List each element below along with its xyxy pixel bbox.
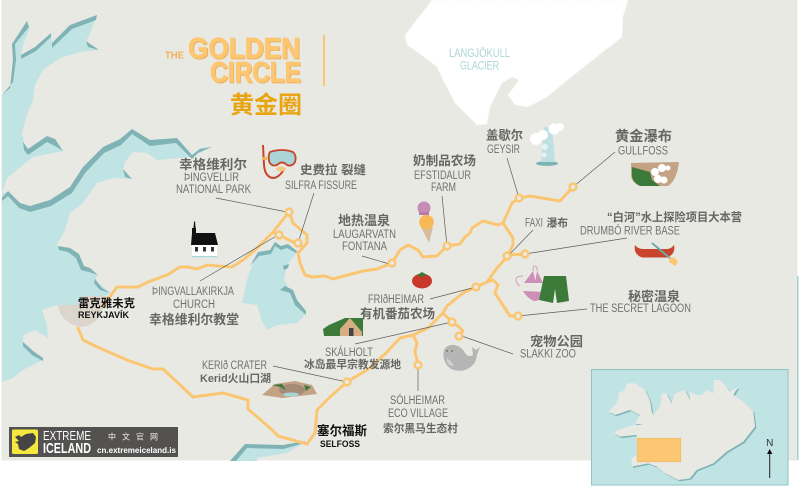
label: Secret Lagoon: THE SECRET LAGOON [590,303,691,315]
icon: tomato [412,272,432,288]
glacier label [449,48,510,72]
icon: Gullfoss waterfall [631,162,679,186]
title: GOLDEN [189,34,301,66]
icon: river raft [635,243,678,266]
icon: turf house [323,318,363,336]
water: western bays [2,15,212,382]
title: GOLDEN [188,33,300,65]
label: Reykjavík: 雷克雅未克 [78,296,135,310]
label: Laugarvatn Fontana: FONTANA [342,241,387,253]
logo: Extreme Iceland: ICELAND [43,440,91,457]
label: Faxi [525,216,568,230]
roads: golden circle route [78,187,573,444]
label: Slakki Zoo [520,334,583,360]
label: Þingvallakirkja Church: ÞINGVALLAKIRKJA [152,286,234,298]
icon: Kerið crater [262,381,317,398]
label: Skálholt: 冰岛最早宗教发源地 [304,357,401,371]
label: Silfra Fissure: SILFRA FISSURE [285,180,357,192]
label: Kerið Crater: Kerid火山口湖 [200,371,271,385]
label: Faxi: FAXI [525,218,543,230]
label: Slakki Zoo: 宠物公园 [530,334,583,349]
label: Sólheimar Eco Village: 索尔黑马生态村 [383,422,458,435]
label: Kerið Crater [200,360,271,385]
label: Laugarvatn Fontana: LAUGARVATN [333,229,396,241]
icon: seal [443,345,480,371]
stop markers [276,184,576,385]
label: Efstidalur Farm: EFSTIDALUR [414,170,471,182]
label: Gullfoss [615,127,672,158]
label: Þingvellir National Park: NATIONAL PARK [176,184,251,196]
label: Þingvellir National Park: 幸格维利尔 [179,157,247,172]
inset: Iceland locator map: N [766,438,773,449]
label: Skálholt [304,346,401,371]
label: Efstidalur Farm: 奶制品农场 [413,153,476,168]
icon: swimwear [516,266,569,303]
title [165,33,325,119]
label: Friðheimar: 有机番茄农场 [360,306,435,321]
title: 黄金圈 [230,91,302,119]
inset: Iceland locator map [592,370,788,485]
label: Silfra Fissure: 史费拉 裂缝 [300,162,366,177]
Reykjavík area [58,296,109,327]
logo: Extreme Iceland [9,427,178,457]
logo: Extreme Iceland: cn.extremeiceland.is [97,446,177,455]
label: Reykjavík: REYKJAVÍK [78,310,129,321]
label: Drumbó River Base: DRUMBÓ RIVER BASE [580,224,680,238]
label: Laugarvatn Fontana: 地热温泉 [338,213,390,228]
logo: Extreme Iceland: EXTREME [43,429,91,443]
logo: Extreme Iceland: 中文官网 [108,432,158,442]
title: CIRCLE [210,57,301,89]
label: Friðheimar [360,294,435,321]
icon: church [191,221,218,258]
label: Drumbó River Base: “白河”水上探险项目大本营 [607,210,742,224]
label: Selfoss: 塞尔福斯 [317,423,367,438]
glacier label: GLACIER [460,60,499,72]
icon: geyser [530,123,564,166]
label: Friðheimar: FRIðHEIMAR [368,294,424,306]
label: Selfoss [317,423,367,450]
water: south coast inlet [230,441,305,461]
label: Þingvallakirkja Church: 幸格维利尔教堂 [149,312,239,327]
label: Selfoss: SELFOSS [320,439,360,450]
label: Geysir: GEYSIR [487,144,520,156]
label: Þingvellir National Park: ÞINGVELLIR [184,172,239,184]
water: Þingvallavatn lake [242,242,306,330]
label: Þingvallakirkja Church: CHURCH [173,299,215,311]
label: Reykjavík [78,296,135,321]
label: Gullfoss: GULLFOSS [618,146,668,158]
label: Geysir [486,128,523,156]
label: Efstidalur Farm: FARM [431,182,456,194]
label: Geysir: 盖歇尔 [486,128,523,142]
label: Efstidalur Farm [413,153,476,194]
label: Skálholt: SKÁLHOLT [325,346,373,359]
leader lines [200,152,627,391]
glacier label: LANGJÖKULL [449,48,510,60]
glacier: Langjökull [405,0,628,125]
icon: snorkel mask [262,145,296,178]
label: Sólheimar Eco Village: SÓLHEIMAR [390,394,445,407]
label: Faxi: 瀑布 [546,216,568,230]
label: Gullfoss: 黄金瀑布 [615,127,672,145]
label: Secret Lagoon [590,289,691,315]
title: THE [165,50,184,62]
title: CIRCLE [211,58,302,90]
label: Þingvellir National Park [176,157,251,196]
icon: ice cream [418,202,434,243]
label: Kerið Crater: KERIð CRATER [202,360,267,372]
label: Secret Lagoon: 秘密温泉 [628,289,680,304]
label: Slakki Zoo: SLAKKI ZOO [520,348,576,360]
label: Þingvallakirkja Church [149,286,239,327]
label: Drumbó River Base [580,210,742,238]
label: Silfra Fissure [285,162,366,192]
label: Sólheimar Eco Village: ECO VILLAGE [388,408,448,420]
label: Sólheimar Eco Village [383,394,458,435]
label: Laugarvatn Fontana [333,213,396,253]
